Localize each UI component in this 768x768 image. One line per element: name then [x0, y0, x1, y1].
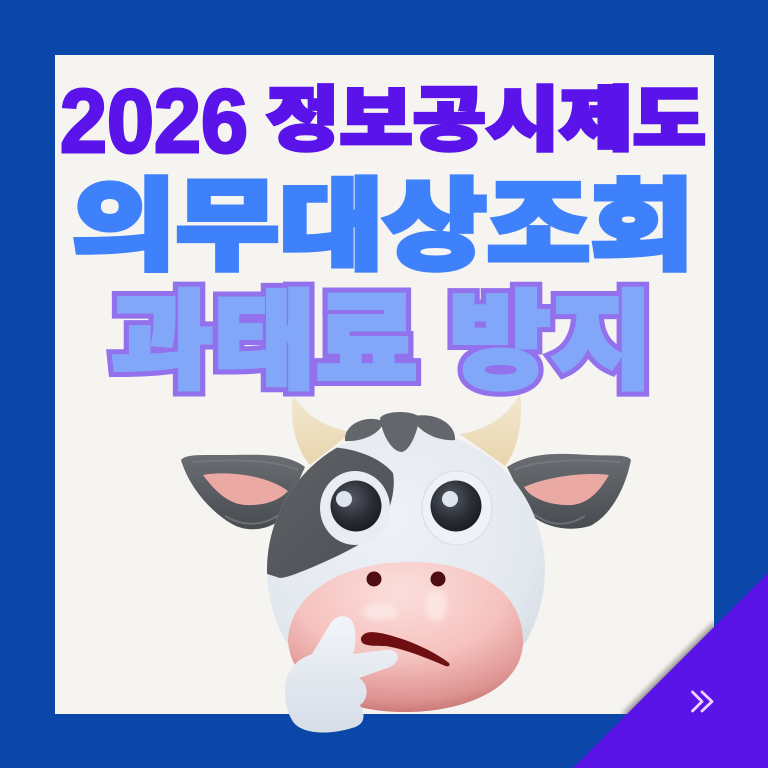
- corner triangle: [573, 573, 768, 768]
- right ear: [507, 454, 631, 529]
- right eye: [422, 471, 492, 545]
- muzzle: [288, 562, 523, 712]
- grey patch: [255, 447, 394, 578]
- hand: [285, 616, 398, 733]
- icon: cow horns: [292, 394, 521, 466]
- left ear: [181, 455, 305, 529]
- icon: double chevron: [692, 692, 712, 711]
- left eye: [320, 471, 390, 545]
- panel: cream card: [55, 55, 714, 714]
- heading: 과태료 방지: 과태료 방지: [111, 282, 653, 402]
- heading: 의무대상조회: 의무대상조회: [72, 170, 694, 282]
- muzzle highlight: [362, 590, 447, 622]
- heading: 2026 정보공시제도: [60, 72, 706, 172]
- forelock tuft: [345, 412, 455, 452]
- head: [267, 429, 545, 711]
- heading: 2026 정보공시제도: 정보공시제도: [266, 81, 706, 159]
- heading: 2026 정보공시제도: 2026: [60, 72, 248, 172]
- illustration: thinking cow: [181, 412, 631, 733]
- heading: 과태료 방지: 과태료 방지: [111, 282, 653, 402]
- corner shadow: [620, 620, 714, 714]
- mouth: [361, 632, 450, 666]
- nostrils: [366, 572, 446, 586]
